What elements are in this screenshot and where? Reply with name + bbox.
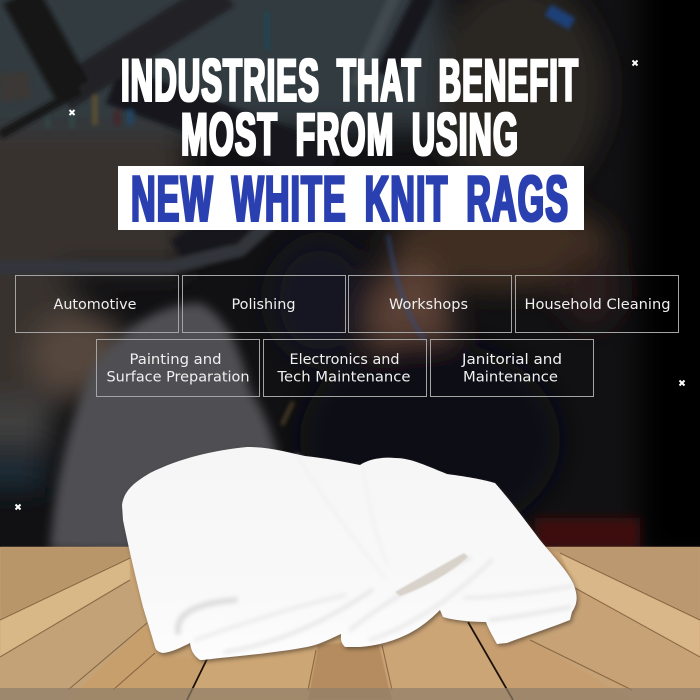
rag fold shading [178, 455, 572, 652]
tag: Painting and Surface Preparation [96, 340, 260, 396]
tag: Household Cleaning [516, 276, 678, 332]
tag: Electronics and Tech Maintenance: Electronics and [290, 352, 400, 368]
tag: Janitorial and Maintenance [430, 340, 594, 396]
tag: Household Cleaning: Household Cleaning [524, 297, 670, 313]
tag: Janitorial and Maintenance: Janitorial and [461, 352, 562, 368]
title [118, 47, 584, 235]
tag: Painting and Surface Preparation: Surface Preparation [106, 370, 250, 386]
tag: Workshops [348, 276, 512, 332]
background photo: blurred workshop scene [0, 0, 700, 560]
tag: Painting and Surface Preparation: Painting and [130, 352, 222, 368]
tag: Electronics and Tech Maintenance: Tech Maintenance [276, 370, 410, 386]
tag: Polishing: Polishing [232, 297, 296, 313]
industry tags [16, 276, 678, 396]
tag: Automotive: Automotive [54, 297, 136, 313]
tag: Polishing [182, 276, 346, 332]
white knit rags [122, 447, 578, 662]
tag: Janitorial and Maintenance: Maintenance [463, 370, 558, 386]
sparkle marks [16, 60, 684, 510]
tag: Workshops: Workshops [389, 297, 468, 313]
tag: Automotive [16, 276, 178, 332]
tag: Electronics and Tech Maintenance [264, 340, 426, 396]
wooden table [0, 547, 700, 700]
